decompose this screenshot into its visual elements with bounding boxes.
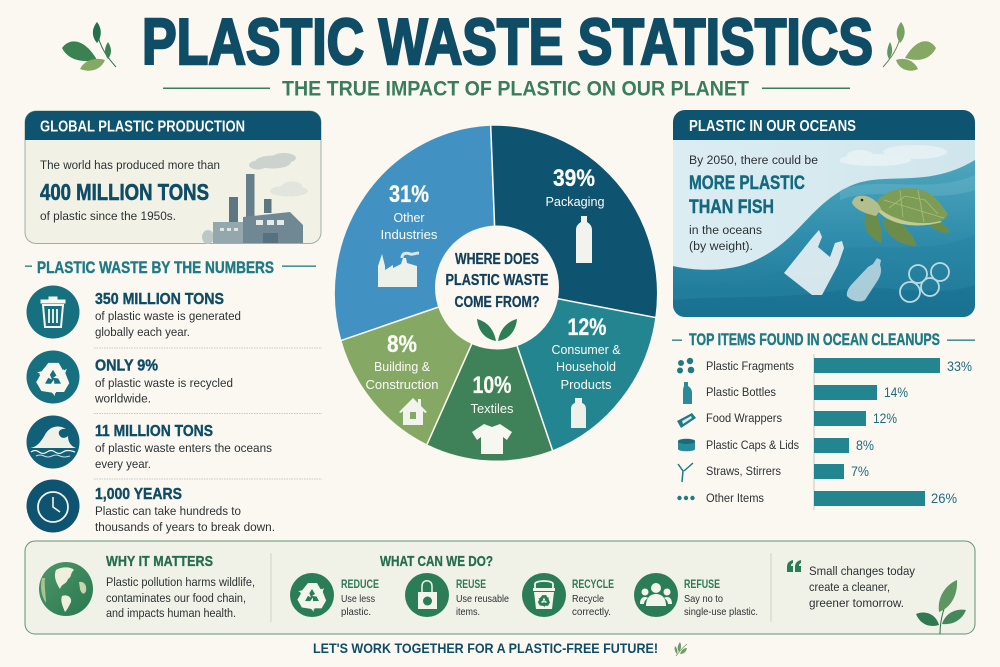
stat: 1,000 years: Plastic can take hundreds to — [95, 504, 241, 518]
action: reduce: REDUCE — [341, 577, 379, 591]
stat: 1,000 years: 1,000 YEARS — [95, 486, 182, 503]
row: plastic bottles — [683, 382, 908, 404]
label: consumer and household: Household — [556, 360, 616, 374]
icon: globe — [39, 562, 93, 616]
row: other items: Other Items — [706, 491, 764, 505]
action: refuse — [634, 573, 758, 618]
section: plastic waste by the numbers — [25, 259, 322, 534]
row: plastic bottles: 14% — [884, 384, 908, 400]
stat: only 9%: of plastic waste is recycled — [95, 376, 233, 390]
quote — [787, 560, 966, 634]
panel: global plastic production — [25, 111, 321, 244]
row: straws and stirrers: Straws, Stirrers — [706, 464, 781, 478]
heading: PLASTIC WASTE BY THE NUMBERS — [37, 259, 274, 277]
center label: COME FROM? — [454, 294, 540, 311]
center label — [435, 226, 559, 350]
text block: 400 MILLION TONS — [40, 179, 209, 205]
footer call to action: LET'S WORK TOGETHER FOR A PLASTIC-FREE FUTURE! — [313, 640, 658, 656]
icon: bottle — [571, 398, 586, 428]
label: other industries — [380, 181, 438, 242]
icon: sprout — [477, 319, 517, 341]
row: plastic fragments: Plastic Fragments — [706, 359, 794, 373]
label: consumer and household: Products — [560, 378, 612, 392]
action: reduce: plastic. — [341, 606, 371, 618]
text block: THAN FISH — [689, 197, 774, 218]
slice: building and construction 8% — [341, 287, 497, 445]
label: consumer and household — [552, 314, 621, 392]
label: textiles: 10% — [472, 372, 512, 399]
text block: MORE PLASTIC — [689, 173, 805, 194]
icon: t-shirt — [472, 424, 512, 454]
bar chart — [677, 354, 972, 510]
header — [62, 5, 936, 100]
label: textiles — [470, 372, 514, 416]
action: refuse: single-use plastic. — [684, 606, 758, 618]
row: plastic bottles: Plastic Bottles — [706, 385, 776, 399]
panel: plastic in our oceans — [673, 110, 975, 317]
slice: packaging 39% — [491, 125, 658, 318]
stat: 350 million tons — [26, 286, 241, 339]
action: reduce — [290, 573, 379, 618]
quote: Small changes today — [809, 564, 916, 578]
illustration: ocean — [673, 140, 975, 317]
icon: house — [399, 398, 427, 425]
icon: quote mark — [787, 560, 801, 572]
stat: 11 million tons: of plastic waste enters the oceans — [95, 441, 272, 455]
row: plastic caps and lids: 8% — [856, 437, 874, 453]
icon: factory — [378, 253, 419, 287]
action: recycle: correctly. — [572, 606, 611, 618]
action: reuse: REUSE — [456, 577, 486, 591]
action: reuse: Use reusable — [456, 593, 509, 605]
stat: only 9%: ONLY 9% — [95, 358, 158, 374]
icon: turtle — [852, 188, 950, 246]
stat: 1,000 years — [26, 480, 275, 534]
icon: wave — [26, 416, 80, 468]
label: building and construction: 8% — [387, 331, 417, 358]
why it matters: contaminates our food chain, — [106, 591, 246, 605]
row: plastic caps and lids — [678, 437, 874, 453]
row: plastic fragments — [677, 358, 972, 374]
panel: bottom band — [25, 541, 975, 634]
row: other items: 26% — [931, 490, 957, 506]
stat: only 9%: worldwide. — [94, 392, 151, 406]
row: straws and stirrers: 7% — [851, 463, 869, 479]
row: plastic fragments: 33% — [947, 358, 972, 374]
label: consumer and household: Consumer & — [552, 343, 621, 357]
quote: create a cleaner, — [809, 580, 890, 594]
icon: bottle — [576, 216, 592, 263]
action: recycle — [522, 573, 614, 618]
heading: PLASTIC IN OUR OCEANS — [689, 118, 856, 135]
what can we do: WHAT CAN WE DO? — [380, 554, 493, 570]
slice: consumer and household 12% — [497, 287, 656, 451]
why it matters: WHY IT MATTERS — [106, 554, 213, 570]
header — [673, 110, 975, 140]
stat: 11 million tons: 11 MILLION TONS — [95, 423, 213, 440]
action: recycle: RECYCLE — [572, 577, 614, 591]
icon: six-pack rings — [900, 263, 949, 302]
row: food wrappers: Food Wrappers — [706, 411, 782, 425]
action: reuse: items. — [456, 606, 480, 618]
subtitle: THE TRUE IMPACT OF PLASTIC ON OUR PLANET — [282, 78, 749, 100]
pie chart: where does plastic waste come from — [334, 125, 658, 461]
stat: 1,000 years: thousands of years to break down. — [95, 520, 275, 534]
text block — [40, 158, 220, 223]
row: plastic caps and lids: Plastic Caps & Lids — [706, 438, 799, 452]
text block: of plastic since the 1950s. — [40, 209, 176, 223]
slice: textiles 10% — [427, 287, 553, 461]
section: top items found in ocean cleanups — [672, 331, 975, 510]
text block: in the oceans — [689, 223, 762, 237]
icon: plastic bag — [784, 230, 844, 295]
action: recycle: Recycle — [572, 593, 604, 605]
label: building and construction: Building & — [374, 360, 431, 374]
stat: 350 million tons: of plastic waste is generated — [95, 309, 241, 323]
center label: WHERE DOES — [455, 251, 539, 268]
label: packaging: 39% — [553, 165, 595, 192]
icon: plant — [916, 580, 966, 634]
label: other industries: Industries — [380, 228, 438, 242]
icon: recycle — [26, 350, 80, 404]
heading: GLOBAL PLASTIC PRODUCTION — [40, 118, 245, 136]
label: textiles: Textiles — [470, 402, 514, 416]
label: building and construction — [366, 331, 439, 392]
why it matters: and impacts human health. — [106, 606, 236, 620]
label: other industries: Other — [394, 211, 424, 225]
action: reuse — [405, 573, 509, 618]
action: refuse: REFUSE — [684, 577, 720, 591]
why it matters — [39, 554, 255, 620]
row: food wrappers: 12% — [873, 410, 897, 426]
icon: plastic bottle — [847, 258, 881, 301]
label: other industries: 31% — [389, 181, 429, 208]
stat: 11 million tons — [26, 416, 272, 471]
action: reduce: Use less — [341, 593, 375, 605]
label: consumer and household: 12% — [568, 314, 607, 341]
label: packaging — [546, 165, 605, 209]
what can we do — [290, 554, 758, 618]
text block: (by weight). — [689, 239, 753, 253]
why it matters: Plastic pollution harms wildlife, — [106, 575, 255, 589]
stat: only 9% — [26, 350, 233, 406]
text block — [689, 153, 818, 253]
quote: greener tomorrow. — [809, 596, 904, 610]
text block: By 2050, there could be — [689, 153, 818, 167]
icon: footer leaf — [675, 642, 687, 656]
row: straws and stirrers — [678, 463, 869, 482]
icon: left leaves — [62, 22, 116, 71]
stat: 350 million tons: globally each year. — [95, 325, 190, 339]
icon: right leaves — [883, 22, 936, 71]
text block: The world has produced more than — [40, 158, 220, 172]
action: refuse: Say no to — [684, 593, 723, 605]
slice: other industries 31% — [334, 125, 497, 341]
label: building and construction: Construction — [366, 378, 439, 392]
center label: PLASTIC WASTE — [446, 272, 548, 289]
icon: factory — [202, 153, 308, 244]
label: packaging: Packaging — [546, 195, 605, 209]
stat: 11 million tons: every year. — [95, 457, 151, 471]
row: food wrappers — [677, 410, 897, 428]
stat: 350 million tons: 350 MILLION TONS — [95, 291, 224, 308]
row: other items — [677, 490, 957, 506]
icon: clock — [26, 480, 80, 532]
icon: trash can — [26, 286, 80, 338]
